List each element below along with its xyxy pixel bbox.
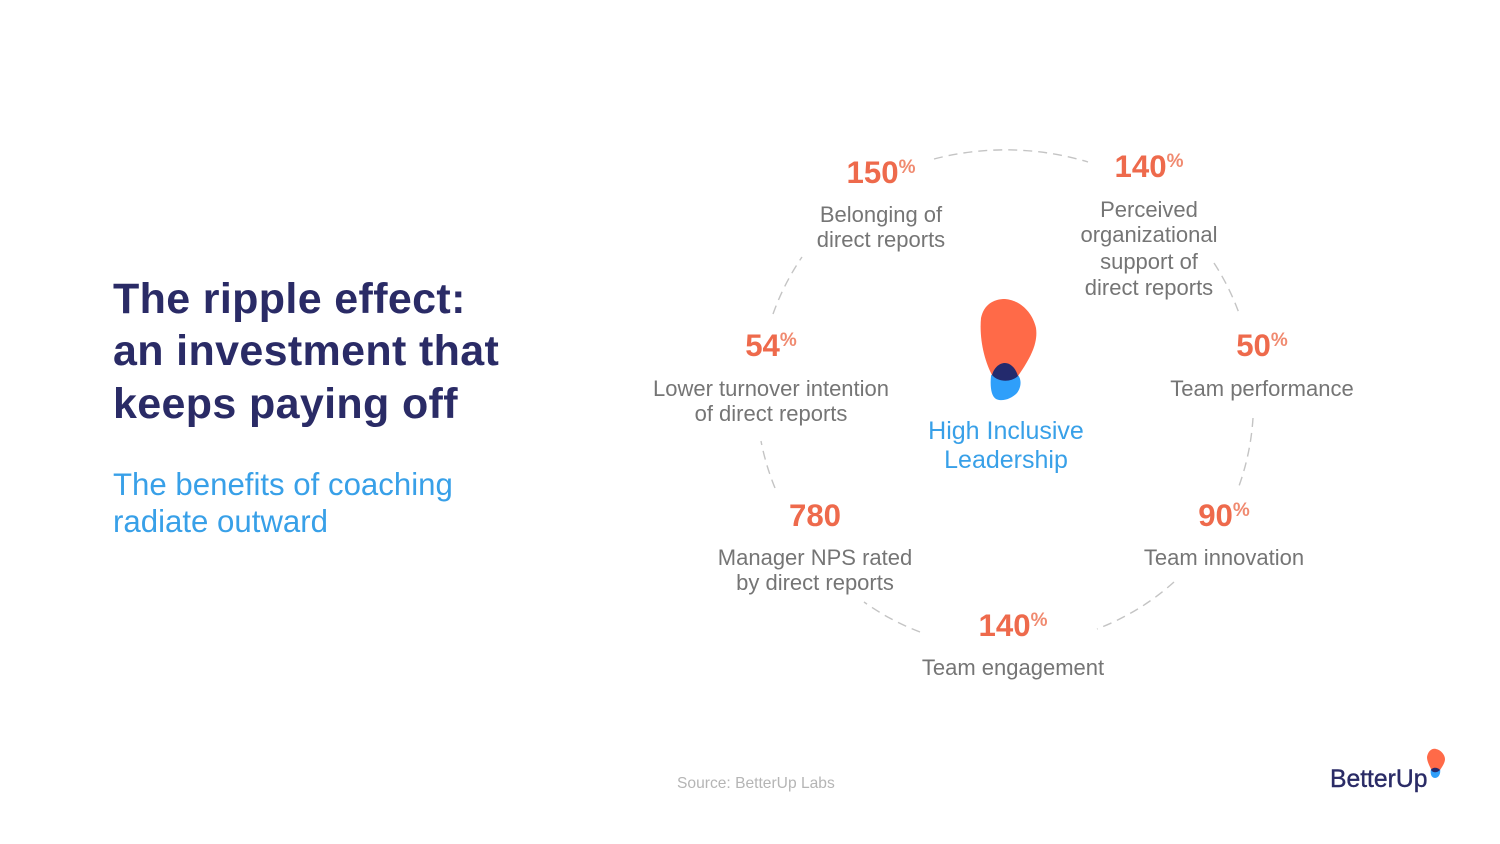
icon: central coral and blue blob [981, 299, 1036, 400]
metric: 50% team performance: Team performance [1170, 376, 1354, 401]
metric: 140% perceived organizational support: Perceived [1100, 197, 1198, 222]
title: The ripple effect: [113, 275, 466, 323]
metric: 150% belonging: 150 [847, 155, 899, 190]
metric: 50% team performance: 50 [1236, 328, 1271, 363]
metric: 150% belonging [817, 155, 945, 252]
title [113, 275, 499, 428]
center label: High Inclusive Leadership: Leadership [944, 446, 1068, 474]
metric: 140% perceived organizational support: 140 [1115, 149, 1167, 184]
subtitle [113, 467, 453, 539]
dashed ripple circle [761, 150, 1253, 632]
metric: 150% belonging: direct reports [817, 227, 945, 252]
metric: 54% lower turnover: of direct reports [695, 401, 847, 426]
metric: 140% perceived organizational support: direct reports [1085, 275, 1213, 300]
metric: 140% perceived organizational support: support of [1100, 249, 1199, 274]
metric: 140% perceived organizational support: % [1167, 151, 1184, 172]
title: an investment that [113, 327, 499, 375]
metric: 50% team performance [1170, 328, 1354, 401]
metric: 140% perceived organizational support [1081, 149, 1217, 300]
metric: 780 manager NPS: Manager NPS rated [718, 545, 912, 570]
metric: 780 manager NPS: by direct reports [736, 570, 894, 595]
title: keeps paying off [113, 380, 458, 428]
metric: 54% lower turnover [653, 328, 889, 426]
metric: 150% belonging: Belonging of [820, 202, 943, 227]
metric: 140% team engagement: % [1031, 610, 1048, 631]
metric: 90% team innovation [1144, 498, 1304, 570]
source note: Source: BetterUp Labs [677, 775, 835, 792]
metric: 54% lower turnover: 54 [745, 328, 780, 363]
metric: 140% perceived organizational support: organizational [1081, 222, 1217, 247]
subtitle: The benefits of coaching [113, 467, 453, 502]
metric: 150% belonging: % [899, 157, 916, 178]
metric: 780 manager NPS [718, 498, 912, 595]
metric: 140% team engagement: 140 [979, 608, 1031, 643]
center label: High Inclusive Leadership: High Inclusive [928, 417, 1084, 445]
metric: 90% team innovation: 90 [1198, 498, 1233, 533]
logo: BetterUp [1330, 749, 1445, 793]
center label: High Inclusive Leadership [928, 417, 1084, 474]
logo: BetterUp: BetterUp [1330, 766, 1427, 793]
metric: 50% team performance: % [1271, 330, 1288, 351]
metric: 140% team engagement: Team engagement [922, 655, 1104, 680]
metric: 140% team engagement [922, 608, 1104, 680]
metric: 90% team innovation: % [1233, 500, 1250, 521]
metric: 90% team innovation: Team innovation [1144, 545, 1304, 570]
metric: 54% lower turnover: % [780, 330, 797, 351]
subtitle: radiate outward [113, 504, 328, 539]
metric: 780 manager NPS: 780 [789, 498, 841, 533]
metric: 54% lower turnover: Lower turnover intention [653, 376, 889, 401]
